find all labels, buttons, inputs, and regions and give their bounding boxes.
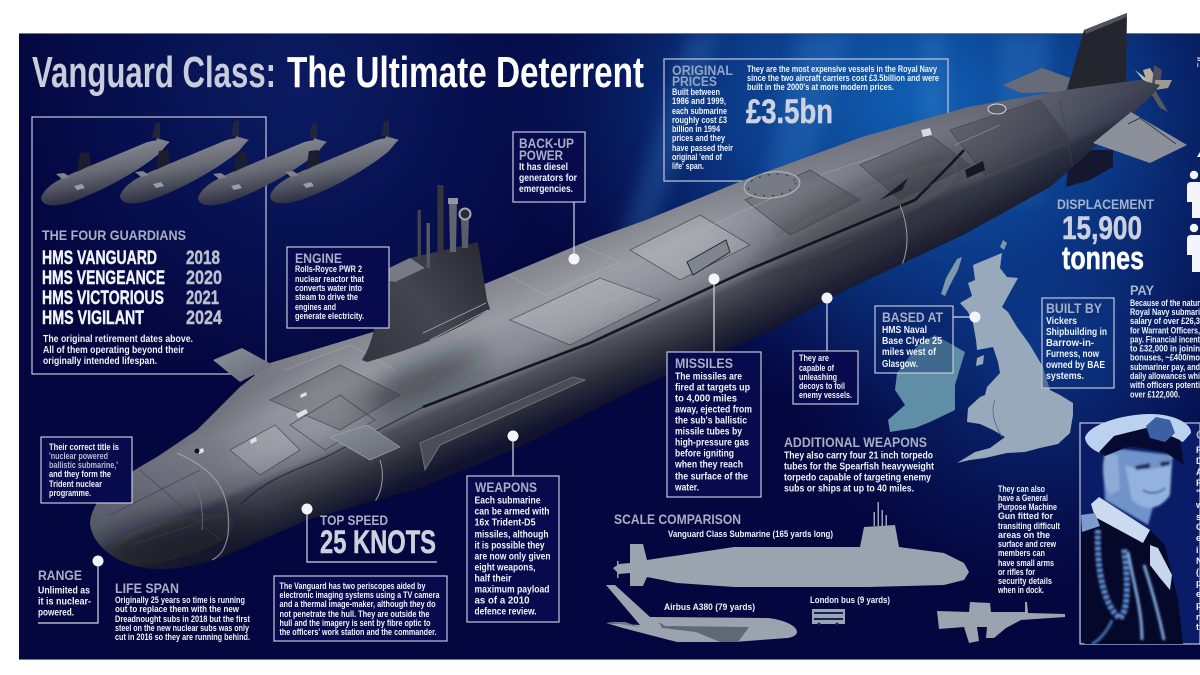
hull seams <box>423 150 964 407</box>
callout: weapons: maximum payload <box>474 584 550 596</box>
callout: built by: Shipbuilding in <box>1046 326 1107 338</box>
sail <box>362 242 490 362</box>
callout: missiles <box>667 274 761 497</box>
text block: life span: steel on the new nuclear subs was only <box>115 623 249 633</box>
callout: periscopes: electronic imaging systems using a TV camera <box>280 590 440 600</box>
list: submarines and retirement years: 2021 <box>186 288 219 309</box>
callout: missiles: before igniting <box>675 448 734 460</box>
callout: based at: miles west of <box>882 346 936 358</box>
icon: four small submarines <box>41 120 399 205</box>
panel: displacement: DISPLACEMENT <box>1057 197 1155 212</box>
panel: original prices: roughly cost £3 <box>672 115 727 126</box>
callout: built by: Vickers <box>1046 315 1077 327</box>
text block: machine gun: transiting difficult <box>998 521 1060 531</box>
callout: range: it is nuclear- <box>38 596 91 608</box>
callout: weapons <box>467 430 559 622</box>
chart: scale comparison: Airbus A380 (79 yards) <box>664 602 755 613</box>
callout: based at <box>875 306 980 373</box>
masts <box>418 185 470 268</box>
callout: missiles: the surface of the <box>675 470 748 482</box>
portrait: commander <box>1080 414 1200 644</box>
callout: periscopes <box>274 576 447 641</box>
neck and face <box>1103 448 1173 525</box>
callout: top speed: TOP SPEED <box>320 513 388 528</box>
callout: back-up power: It has diesel <box>519 161 568 173</box>
forward planes <box>213 348 273 382</box>
text block: additional weapons: subs or ships at up to 40 miles. <box>784 482 914 494</box>
clipped column text: ( <box>1196 567 1199 577</box>
text block: additional weapons: They also carry four 21 inch torpedo <box>784 450 933 462</box>
text block: machine gun: members can <box>998 548 1045 558</box>
callout: based at: BASED AT <box>882 310 944 325</box>
callout: decoys: enemy vessels. <box>799 390 852 400</box>
silhouette: Airbus A380 <box>606 585 797 642</box>
callout: back-up power: emergencies. <box>519 183 573 195</box>
list: submarines and retirement years <box>42 248 222 329</box>
icon: crew figures: i <box>1197 63 1199 69</box>
callout: range: RANGE <box>38 568 82 583</box>
callout: correct title: and they form the <box>49 469 111 479</box>
callout: decoys: They are <box>799 353 829 363</box>
panel: original prices: £3.5bn <box>746 93 833 131</box>
callout: decoys: capable of <box>799 363 835 373</box>
panel: original prices: PRICES <box>672 74 717 89</box>
callout: engine: ENGINE <box>295 251 342 266</box>
panel: displacement <box>1057 197 1155 276</box>
callout: weapons: it is possible they <box>474 540 545 552</box>
text block: additional weapons: ADDITIONAL WEAPONS <box>784 435 927 450</box>
text block: life span: cut in 2016 so they are running behind. <box>115 632 250 642</box>
clipped column text: r <box>1196 612 1200 622</box>
callout: decoys: unleashing <box>799 372 837 382</box>
collar <box>1091 497 1150 543</box>
list: submarines and retirement years: HMS VICTORIOUS <box>42 288 164 309</box>
callout: range <box>38 556 104 623</box>
callout: missiles: away, ejected from <box>675 404 752 416</box>
callout: correct title: Their correct title is <box>49 442 119 452</box>
callout: weapons: eight weapons, <box>474 562 536 574</box>
text block: machine gun: Gun fitted for <box>998 511 1053 521</box>
text block: pay: over £122,000. <box>1130 390 1180 400</box>
callout: engine <box>287 247 389 328</box>
silhouette: submarine <box>613 502 969 587</box>
callout: back-up power <box>513 132 585 264</box>
callout: engine: nuclear reactor that <box>295 274 364 284</box>
panel: original prices: since the two aircraft carriers cost £3.5billion and were <box>747 73 939 84</box>
text block: machine gun: have a General <box>998 493 1048 503</box>
text block: machine gun <box>997 484 1060 595</box>
callout: built by: owned by BAE <box>1046 359 1105 371</box>
text block: additional weapons <box>784 435 934 494</box>
callout: weapons: Each submarine <box>474 494 541 506</box>
text block: additional weapons: tubes for the Spearfish heavyweight <box>784 460 934 472</box>
text block: machine gun: when in dock. <box>997 585 1044 595</box>
callout: engine: engines and <box>295 302 336 312</box>
heading: the four guardians: THE FOUR GUARDIANS <box>42 228 186 243</box>
callout: weapons: are now only given <box>474 550 550 562</box>
callout: decoys: decoys to foil <box>799 381 845 391</box>
panel: original prices: They are the most expensive vessels in the Royal Navy <box>747 64 938 75</box>
callout: based at: Glasgow. <box>882 358 918 370</box>
callout: weapons: WEAPONS <box>475 480 537 495</box>
callout: back-up power: BACK-UP <box>519 136 574 151</box>
callout: range: powered. <box>38 606 74 618</box>
callout: engine: generate electricity. <box>295 311 364 321</box>
callout: missiles: The missiles are <box>675 370 742 382</box>
silhouette: London bus <box>812 609 845 626</box>
note: retirement dates: The original retirement dates above. <box>43 333 193 345</box>
chart: scale comparison: Vanguard Class Submarine (165 yards long) <box>668 529 833 540</box>
text block: machine gun: surface and crew <box>998 539 1057 549</box>
panel: original prices <box>664 59 948 181</box>
text block: life span: LIFE SPAN <box>115 581 179 596</box>
callout: weapons: half their <box>474 572 512 584</box>
panel: original prices: have passed their <box>672 143 733 154</box>
panel: original prices: Built between <box>672 87 720 98</box>
panel: original prices: ORIGINAL <box>672 63 733 78</box>
text block: pay <box>1129 283 1200 400</box>
callout: weapons: missiles, although <box>474 528 548 540</box>
panel: original prices: built in the 2000's at more modern prices. <box>747 82 894 93</box>
callout: back-up power: generators for <box>519 172 577 184</box>
text block: life span <box>115 581 250 642</box>
callout: range: Unlimited as <box>38 584 90 596</box>
callout: periscopes: The Vanguard has two periscopes aided by <box>280 581 426 591</box>
hull plates <box>230 100 1070 475</box>
upper stern plane <box>1003 68 1070 93</box>
title: The Ultimate Deterrent <box>287 48 644 97</box>
panel: the four guardians <box>32 117 266 374</box>
text block: additional weapons: torpedo capable of targeting enemy <box>784 472 931 484</box>
panel: displacement: tonnes <box>1062 240 1144 276</box>
list: submarines and retirement years: 2024 <box>186 308 222 329</box>
callout: back-up power: POWER <box>519 148 563 163</box>
propeller <box>1135 65 1172 112</box>
text block: life span: out to replace them with the new <box>115 604 240 614</box>
title <box>32 48 644 97</box>
callout: weapons: can be armed with <box>474 506 550 518</box>
chart: scale comparison <box>606 502 1065 643</box>
icon: crew figures <box>1187 57 1200 272</box>
callout: top speed: 25 KNOTS <box>320 524 436 560</box>
callout: built by: Barrow-in- <box>1046 337 1094 349</box>
text block: machine gun: or rifles for <box>998 567 1035 577</box>
cap <box>1085 414 1191 453</box>
callout: periscopes: hull and the imagery is sent by fibre optic to <box>280 618 431 628</box>
epaulette <box>1081 513 1100 532</box>
text block: machine gun: have small arms <box>998 558 1054 568</box>
callout: missiles: when they reach <box>674 458 743 470</box>
callout: top speed <box>302 504 437 562</box>
list: submarines and retirement years: HMS VIGILANT <box>42 308 144 329</box>
list: submarines and retirement years: HMS VENGEANCE <box>42 268 165 289</box>
clipped column text <box>1195 428 1200 632</box>
callout: periscopes: and a thermal image-maker, although they do <box>280 599 436 609</box>
map: Britain and Ireland <box>888 240 1073 463</box>
callout: correct title: 'nuclear powered <box>49 451 108 461</box>
list: submarines and retirement years: 2020 <box>186 268 222 289</box>
text block: life span: Dreadnought subs in 2018 but the first <box>115 614 250 624</box>
text block: life span: Originally 25 years so time is running <box>115 595 245 605</box>
text block: machine gun: They can also <box>998 484 1045 494</box>
callout: missiles: missile tubes by <box>675 426 742 438</box>
callout: weapons: as of a 2010 <box>474 594 530 606</box>
note: retirement dates: originally intended lifespan. <box>43 355 157 367</box>
callout: periscopes: not penetrate the hull. They are outside the <box>280 609 430 619</box>
callout: built by: BUILT BY <box>1046 301 1102 316</box>
callout: built by: Furness, now <box>1046 348 1100 360</box>
text block: machine gun: Purpose Machine <box>998 502 1057 512</box>
callout: missiles: water. <box>674 482 699 494</box>
callout: missiles: the sub's ballistic <box>675 414 747 426</box>
hull shading <box>80 60 1170 580</box>
text block: machine gun: security details <box>998 576 1052 586</box>
callout: correct title: programme. <box>49 488 91 498</box>
callout: correct title: Trident nuclear <box>49 479 102 489</box>
upper rudder <box>1066 13 1127 94</box>
clipped column text: t <box>1196 622 1199 632</box>
callout: decoys <box>793 292 858 404</box>
hull <box>90 80 1160 569</box>
callout: missiles: fired at targets up <box>675 382 750 394</box>
body <box>1081 505 1183 644</box>
text block: pay: PAY <box>1130 283 1154 298</box>
chart: scale comparison: London bus (9 yards) <box>810 595 890 606</box>
chart: scale comparison: SCALE COMPARISON <box>614 512 741 527</box>
callout: engine: Rolls-Royce PWR 2 <box>295 264 362 274</box>
callout: built by: systems. <box>1046 370 1084 382</box>
callout: built by <box>1042 298 1114 388</box>
panel: original prices: billion in 1994 <box>672 124 721 135</box>
callout: based at: Base Clyde 25 <box>882 335 942 347</box>
callout: missiles: high-pressure gas <box>675 436 749 448</box>
callout: weapons: defence review. <box>474 606 537 618</box>
clipped column text: i <box>1196 545 1199 555</box>
lower rudder <box>1066 150 1113 187</box>
panel: original prices: 1986 and 1999, <box>672 96 726 107</box>
panel: original prices: each submarine <box>672 106 727 117</box>
list: submarines and retirement years: HMS VANGUARD <box>42 248 157 269</box>
callout: missiles: MISSILES <box>675 356 733 371</box>
panel: displacement: 15,900 <box>1062 210 1142 246</box>
text block: machine gun: areas on the <box>998 530 1050 540</box>
submarine: main hull illustration <box>80 13 1187 580</box>
note: retirement dates <box>43 333 193 367</box>
callout: engine: steam to drive the <box>295 292 358 302</box>
callout: missiles: to 4,000 miles <box>675 392 737 404</box>
title: Vanguard Class: <box>32 48 276 97</box>
note: retirement dates: All of them operating beyond their <box>43 344 184 356</box>
panel: original prices: life' span. <box>672 161 704 172</box>
star medal <box>1150 545 1172 590</box>
callout: based at: HMS Naval <box>882 324 927 336</box>
panel: original prices: prices and they <box>672 133 726 144</box>
list: submarines and retirement years: 2018 <box>186 248 220 269</box>
silhouette: rifle <box>937 602 1065 643</box>
callout: correct title: ballistic submarine,' <box>49 460 118 470</box>
stern plane <box>1093 112 1187 163</box>
callout: weapons: 16x Trident-D5 <box>474 516 536 528</box>
aiguillette <box>1092 530 1164 644</box>
callout: periscopes: the officers' work station and the commander. <box>280 627 436 637</box>
callout: correct title <box>41 437 132 503</box>
callout: engine: converts water into <box>295 283 362 293</box>
panel: original prices: original 'end of <box>672 152 723 163</box>
